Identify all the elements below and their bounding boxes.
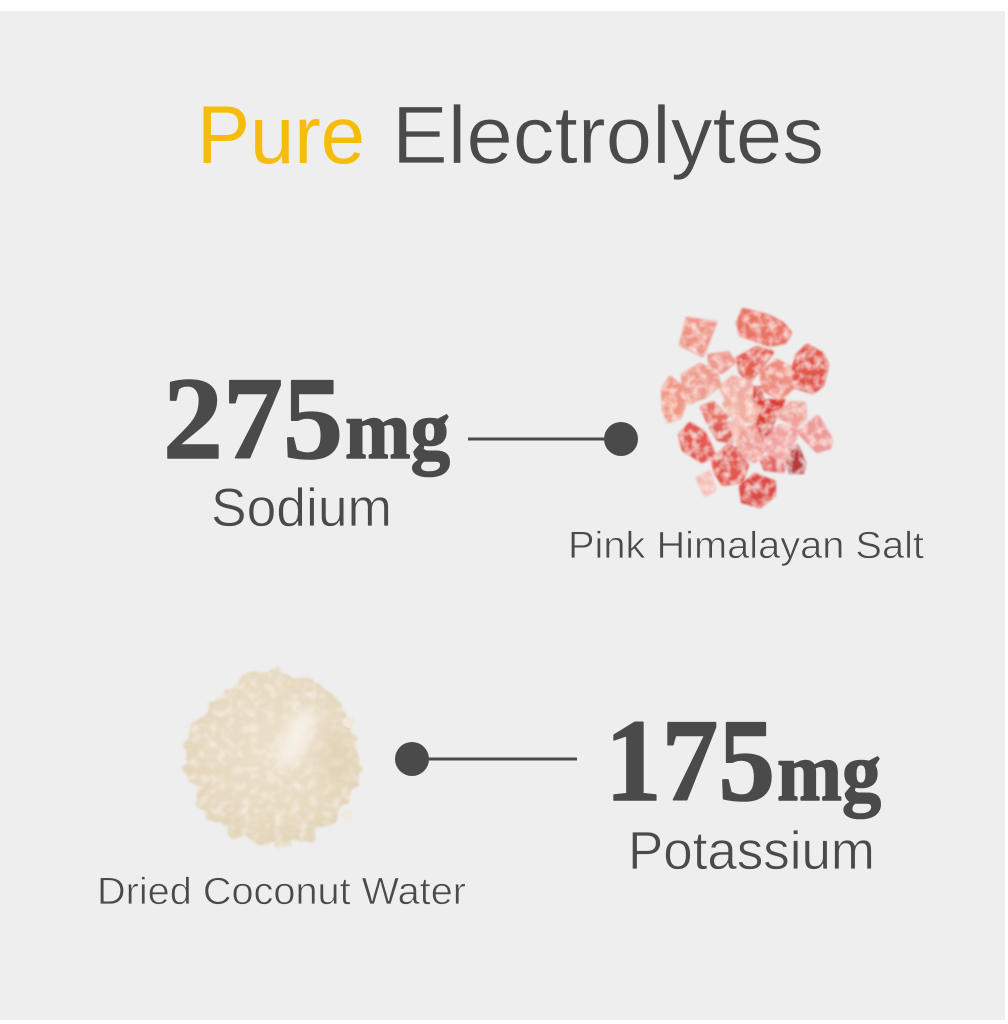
connector: powder to potassium: [395, 742, 577, 776]
ingredient label: pink himalayan salt: Pink Himalayan Salt: [568, 525, 924, 567]
icon: pink himalayan salt crystals: [662, 309, 832, 507]
sodium amount: 275: [163, 353, 343, 484]
potassium label: Potassium: [628, 821, 875, 881]
title: Pure: [197, 90, 365, 181]
connector: sodium to salt: [468, 422, 638, 456]
title: Electrolytes: [392, 90, 824, 181]
ingredient label: dried coconut water: Dried Coconut Water: [97, 871, 466, 913]
potassium amount: 175: [605, 695, 775, 826]
sodium amount: [163, 353, 450, 484]
icon: dried coconut water powder: [188, 673, 360, 845]
sodium amount: mg: [345, 384, 450, 477]
potassium amount: [605, 695, 881, 826]
potassium amount: mg: [777, 726, 881, 819]
sodium label: Sodium: [211, 478, 392, 538]
